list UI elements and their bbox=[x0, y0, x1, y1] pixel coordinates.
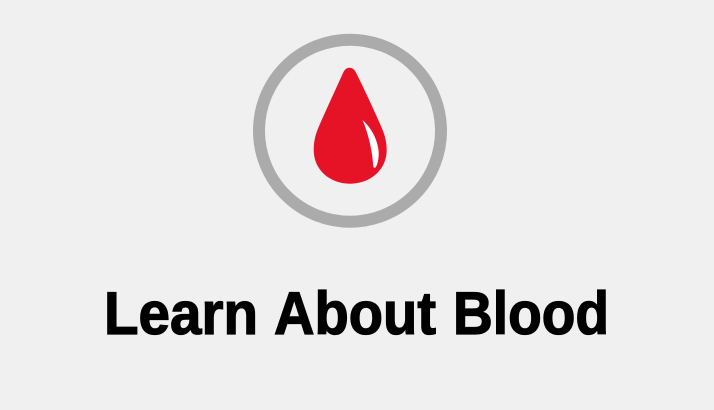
title: Learn bbox=[104, 280, 258, 347]
drop highlight bbox=[362, 120, 379, 168]
title: Blood bbox=[453, 280, 609, 347]
blood drop bbox=[314, 68, 387, 184]
icon ring bbox=[259, 40, 441, 222]
icon: blood drop in ring bbox=[259, 40, 441, 222]
title: About bbox=[274, 280, 436, 347]
title bbox=[104, 280, 609, 347]
